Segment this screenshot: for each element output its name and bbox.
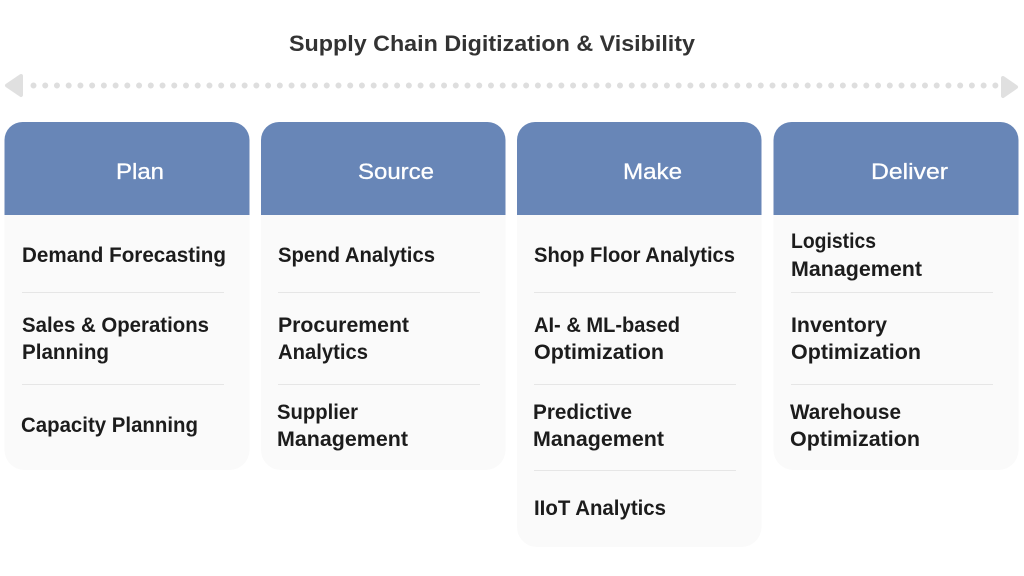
item: Logistics Management: Management <box>791 257 922 281</box>
panel body: Deliver <box>774 215 1018 470</box>
panel: Make <box>517 122 762 547</box>
panel body: Plan <box>4 215 250 470</box>
header: Make: Make <box>623 159 682 184</box>
item: Predictive Management: Predictive <box>533 400 632 424</box>
item: Logistics Management: Logistics <box>791 229 876 253</box>
item: Supplier Management <box>277 400 408 451</box>
item: Predictive Management: Management <box>533 427 664 451</box>
item: Inventory Optimization: Inventory <box>791 313 887 337</box>
item: Shop Floor Analytics: Shop Floor Analytics <box>534 243 735 267</box>
header: Deliver: Deliver <box>871 159 948 184</box>
item: Procurement Analytics <box>278 313 409 364</box>
item: Predictive Management <box>533 400 664 451</box>
arrow: two-way dotted visibility arrow <box>7 76 1016 96</box>
item: Warehouse Optimization: Warehouse <box>790 400 901 424</box>
item: Logistics Management <box>791 229 922 281</box>
item: Sales & Operations Planning: Sales & Operations <box>22 313 209 337</box>
item: Supplier Management: Management <box>277 427 408 451</box>
panel: Deliver <box>774 122 1018 470</box>
item: AI- & ML-based Optimization: AI- & ML-based <box>534 313 680 337</box>
header: Source <box>261 122 506 215</box>
item: Capacity Planning: Capacity Planning <box>21 413 198 437</box>
header: Plan: Plan <box>116 159 164 184</box>
title: Supply Chain Digitization & Visibility <box>289 31 696 56</box>
item: AI- & ML-based Optimization <box>534 313 680 364</box>
panel: Source <box>261 122 506 470</box>
item: Procurement Analytics: Analytics <box>278 340 368 364</box>
item: Warehouse Optimization: Optimization <box>790 427 920 451</box>
header: Make <box>517 122 762 215</box>
item: IIoT Analytics: IIoT Analytics <box>534 496 666 520</box>
item: Supplier Management: Supplier <box>277 400 359 424</box>
item: Sales & Operations Planning: Planning <box>22 340 109 364</box>
panel body: Source <box>261 215 506 470</box>
item: Sales & Operations Planning <box>22 313 209 364</box>
item: Spend Analytics: Spend Analytics <box>278 243 435 267</box>
item: Warehouse Optimization <box>790 400 920 451</box>
item: Procurement Analytics: Procurement <box>278 313 409 337</box>
header: Plan <box>4 122 250 215</box>
panel body: Make <box>517 215 762 547</box>
item: Demand Forecasting: Demand Forecasting <box>22 243 226 267</box>
item: AI- & ML-based Optimization: Optimization <box>534 340 664 364</box>
item: Inventory Optimization: Optimization <box>791 340 921 364</box>
header: Source: Source <box>358 159 434 184</box>
item: Inventory Optimization <box>791 313 921 364</box>
header: Deliver <box>774 122 1018 215</box>
panel: Plan <box>4 122 250 470</box>
